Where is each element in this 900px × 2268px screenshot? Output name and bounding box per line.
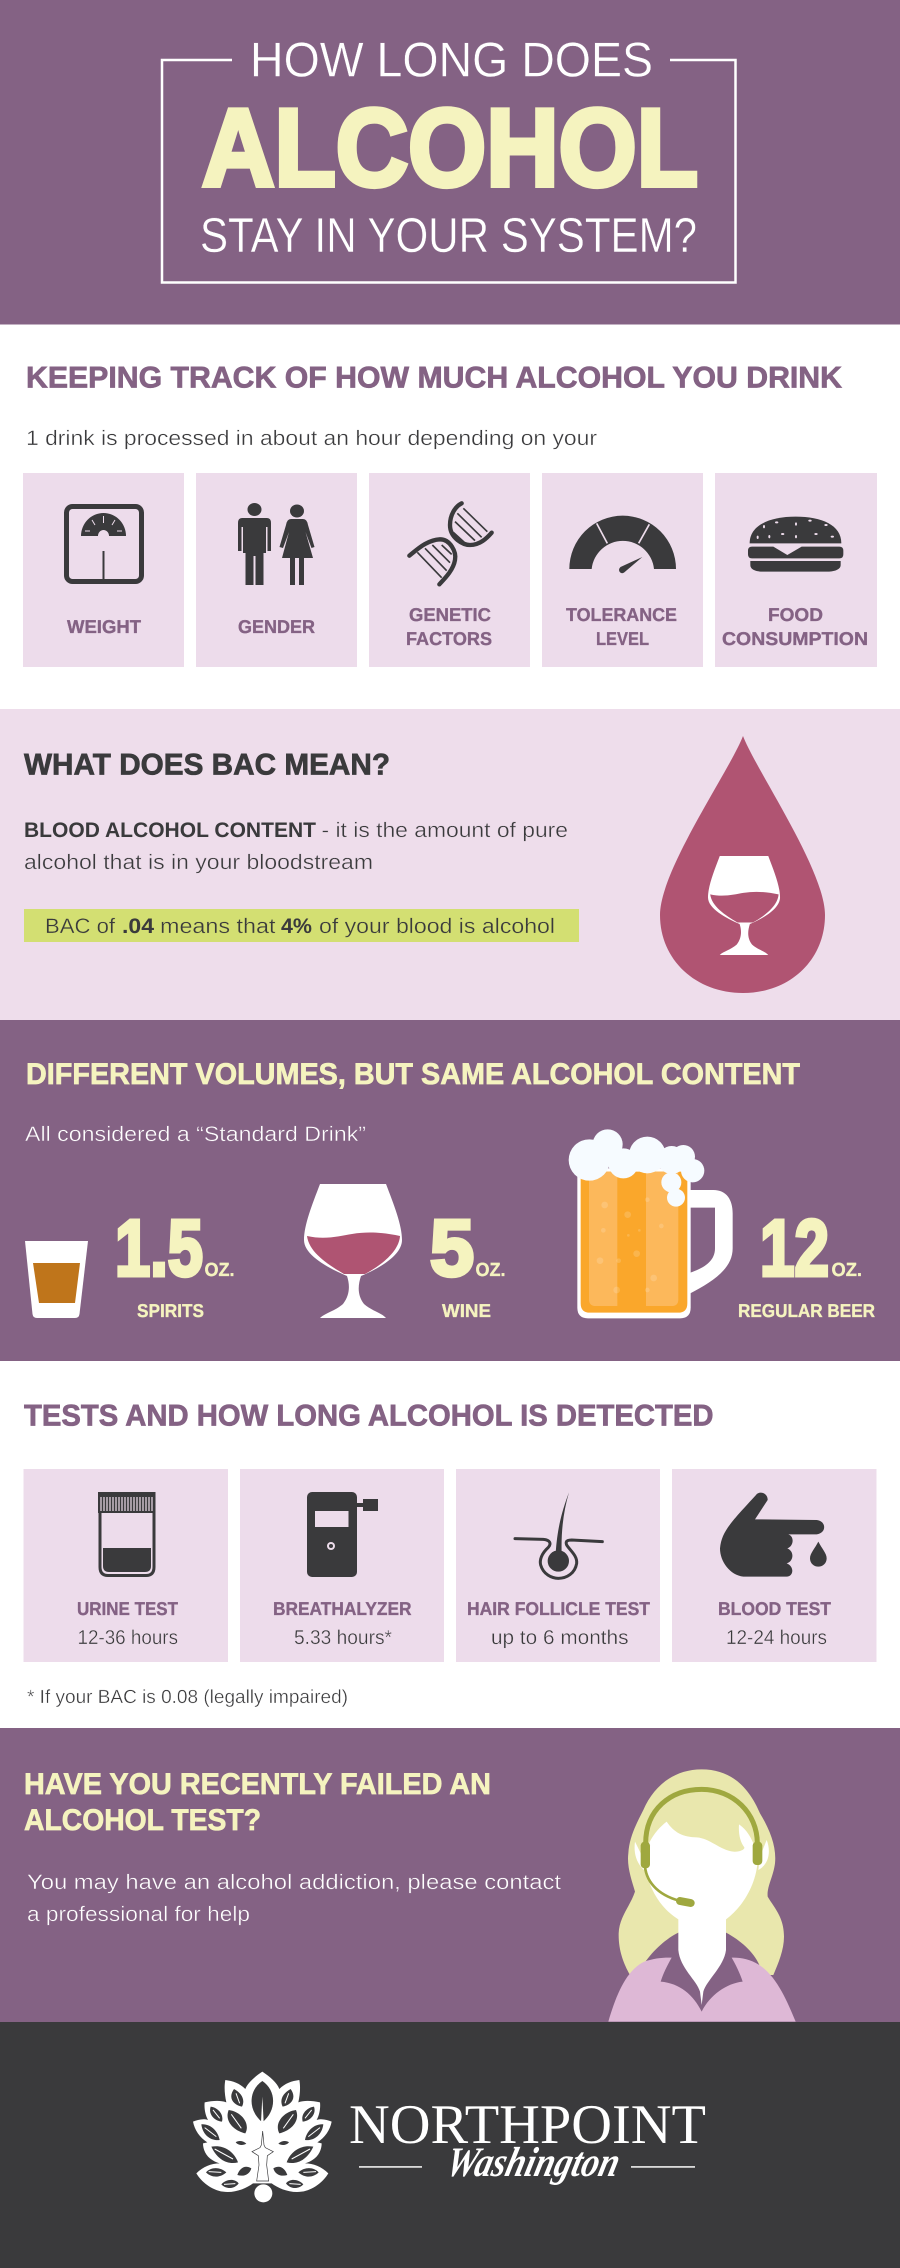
amount: regular beer: REGULAR BEER <box>738 1300 875 1321</box>
panel: failed a test <box>0 1728 900 2022</box>
title frame <box>162 60 736 282</box>
callout: BAC example: of your blood is alcohol <box>319 915 555 938</box>
card: food consumption <box>715 473 877 667</box>
icon: burger <box>748 517 843 572</box>
body text: You may have an alcohol addiction, please contact <box>27 1871 561 1894</box>
illustration: support agent with headset <box>608 1769 796 2022</box>
duration: breathalyzer: 5.33 hours* <box>294 1627 392 1649</box>
icon: blood drop with wine glass <box>660 736 825 993</box>
icon: hair follicle <box>515 1492 602 1578</box>
label: food consumption: FOOD <box>768 604 823 625</box>
heading: HAVE YOU RECENTLY FAILED AN <box>24 1768 491 1801</box>
panel: what does BAC mean <box>0 709 900 1020</box>
definition text: - it is the amount of pure <box>322 819 568 842</box>
label: food consumption <box>722 604 868 649</box>
callout: BAC example: BAC of <box>45 915 115 938</box>
label: tolerance level <box>566 604 677 649</box>
heading: ALCOHOL TEST? <box>24 1804 261 1837</box>
label: genetic factors: FACTORS <box>406 628 492 649</box>
body text: a professional for help <box>27 1903 250 1926</box>
label: tolerance level: LEVEL <box>596 628 649 649</box>
intro text: 1 drink is processed in about an hour depending on your <box>26 427 597 450</box>
amount: regular beer: 12 <box>760 1204 829 1292</box>
amount: wine: 5 <box>430 1204 474 1292</box>
definition text: BLOOD ALCOHOL CONTENT <box>24 819 316 842</box>
label: gender: GENDER <box>238 616 315 637</box>
label: urine test: URINE TEST <box>77 1598 179 1619</box>
icon: shot glass <box>25 1241 88 1318</box>
callout: BAC example: 4% <box>281 915 312 938</box>
heading: KEEPING TRACK OF HOW MUCH ALCOHOL YOU DRINK <box>26 362 842 394</box>
card: genetic factors <box>369 473 530 667</box>
logo: wordmark: NORTHPOINT <box>349 2094 706 2156</box>
amount: regular beer <box>738 1204 875 1321</box>
card: hair follicle test <box>456 1469 660 1662</box>
definition text <box>24 819 568 874</box>
icon: weighing scale <box>66 506 142 582</box>
card: tolerance level <box>542 473 703 667</box>
label: blood test: BLOOD TEST <box>718 1598 832 1619</box>
callout: BAC example <box>24 909 579 942</box>
heading <box>24 1768 491 1837</box>
duration: urine test: 12-36 hours <box>78 1627 178 1649</box>
label: tolerance level: TOLERANCE <box>566 604 677 625</box>
label: breathalyzer: BREATHALYZER <box>273 1598 412 1619</box>
callout: BAC example: means that <box>160 915 276 938</box>
icon: DNA helix <box>409 503 492 584</box>
logo: peacock emblem <box>193 2072 332 2202</box>
card: breathalyzer <box>240 1469 444 1662</box>
title main word: ALCOHOL <box>202 86 698 210</box>
label: weight: WEIGHT <box>67 616 142 637</box>
icon: man and woman <box>238 503 314 585</box>
amount: wine: OZ. <box>476 1260 506 1281</box>
amount: spirits: 1.5 <box>115 1204 203 1292</box>
card: gender <box>196 473 357 667</box>
amount: wine: WINE <box>442 1300 491 1321</box>
definition text: alcohol that is in your bloodstream <box>24 851 373 874</box>
duration: blood test: 12-24 hours <box>726 1627 827 1649</box>
title line one: HOW LONG DOES <box>250 34 653 88</box>
callout: BAC example: .04 <box>122 915 154 938</box>
card: weight <box>23 473 184 667</box>
amount: spirits: OZ. <box>204 1260 234 1281</box>
icon: wine glass <box>304 1184 402 1318</box>
icon: breathalyzer <box>307 1492 378 1577</box>
icon: finger with blood drop <box>720 1493 827 1577</box>
heading: TESTS AND HOW LONG ALCOHOL IS DETECTED <box>24 1400 714 1432</box>
logo: wordmark: Washington <box>442 2140 625 2186</box>
amount: spirits: SPIRITS <box>137 1300 204 1321</box>
logo: wordmark <box>349 2094 706 2186</box>
label: genetic factors: GENETIC <box>409 604 491 625</box>
heading: WHAT DOES BAC MEAN? <box>24 748 390 782</box>
duration: hair follicle test: up to 6 months <box>491 1627 628 1649</box>
heading: DIFFERENT VOLUMES, BUT SAME ALCOHOL CONTENT <box>26 1058 800 1091</box>
panel: title header <box>0 0 900 324</box>
panel: footer <box>0 2022 900 2268</box>
label: food consumption: CONSUMPTION <box>722 628 868 649</box>
panel: standard drinks <box>0 1020 900 1361</box>
card: urine test <box>24 1469 228 1662</box>
amount: wine <box>430 1204 506 1321</box>
footnote: * If your BAC is 0.08 (legally impaired) <box>27 1687 348 1708</box>
panel: keeping track <box>23 362 877 667</box>
icon: beer mug <box>569 1129 733 1318</box>
subheading: All considered a “Standard Drink” <box>25 1123 366 1146</box>
card: blood test <box>672 1469 876 1662</box>
panel: tests <box>24 1400 876 1708</box>
label: hair follicle test: HAIR FOLLICLE TEST <box>467 1598 651 1619</box>
title line three: STAY IN YOUR SYSTEM? <box>200 209 697 263</box>
label: genetic factors <box>406 604 492 649</box>
body text <box>27 1871 561 1926</box>
amount: regular beer: OZ. <box>832 1260 862 1281</box>
icon: specimen jar <box>98 1492 156 1576</box>
icon: gauge <box>569 516 676 573</box>
